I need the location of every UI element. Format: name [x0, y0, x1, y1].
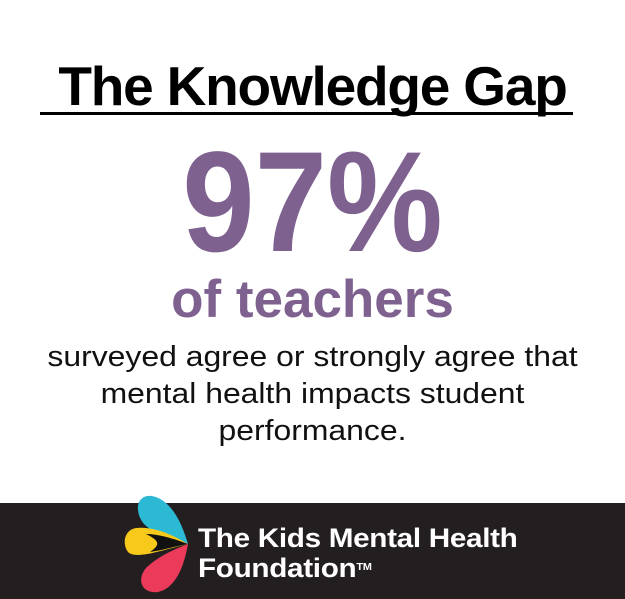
body text: surveyed agree or strongly agree that [47, 341, 578, 373]
title underline [40, 112, 573, 115]
logo text [198, 523, 517, 583]
logo text: The Kids Mental Health [198, 523, 517, 553]
body text [47, 341, 578, 447]
body text: performance. [219, 415, 406, 447]
logo text: FoundationTM [198, 553, 372, 583]
subheading: of teachers: of teachers [171, 270, 454, 329]
footer band [0, 503, 625, 599]
icon: logo petals [124, 496, 188, 592]
big stat 97%: 97% [182, 123, 443, 282]
body text: mental health impacts student [101, 378, 524, 410]
title: The Knowledge Gap [58, 55, 567, 117]
